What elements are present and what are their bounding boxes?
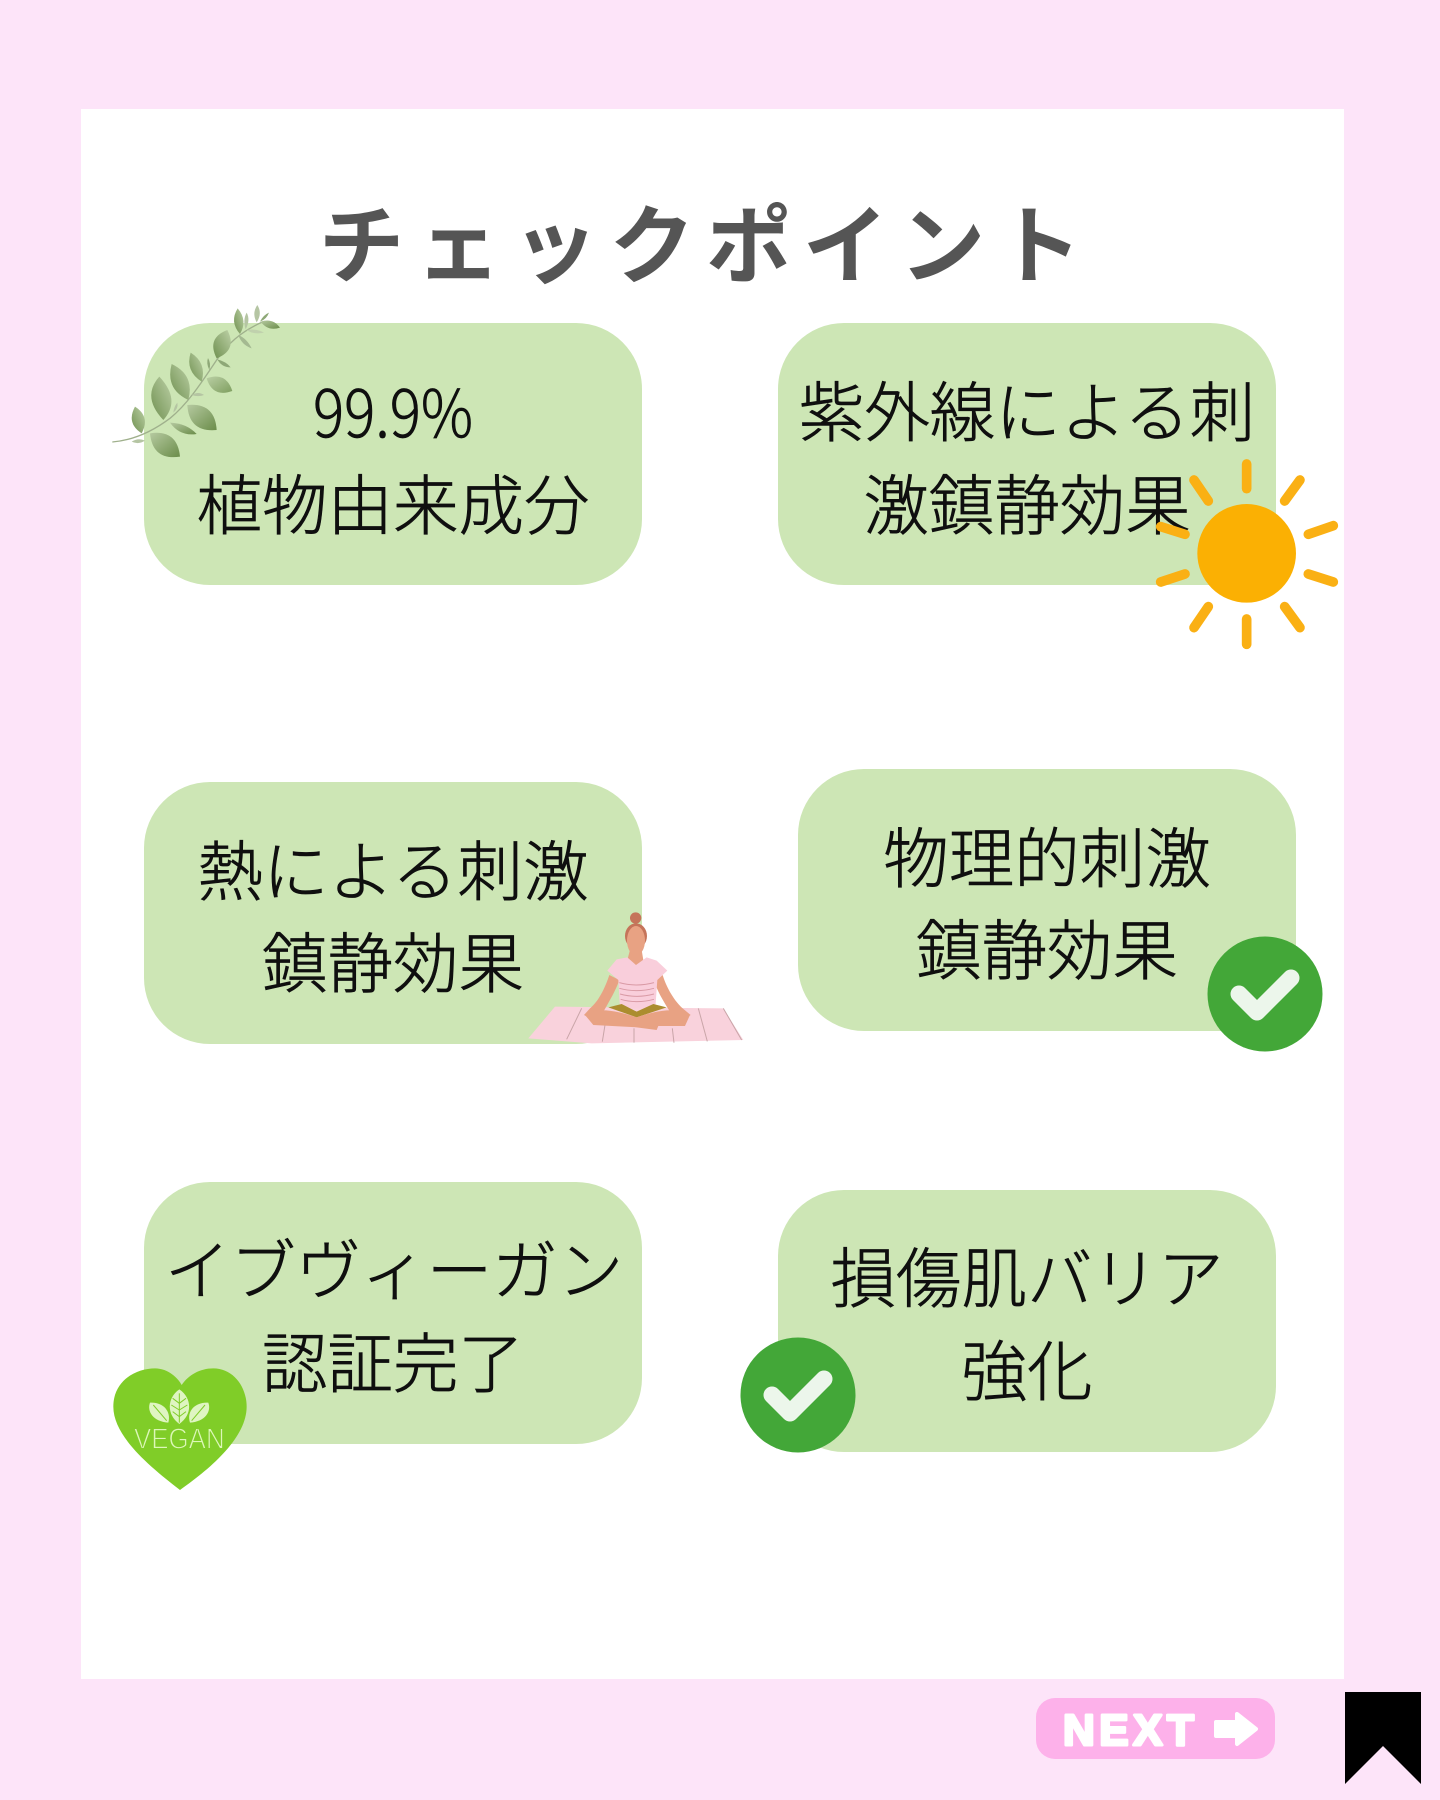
card: UV irritation soothing [778, 323, 1276, 585]
bookmark icon [1345, 1692, 1421, 1784]
card: plant-derived ingredients [144, 323, 642, 585]
card: UV irritation soothing: 激鎮静効果 [863, 453, 1191, 548]
card: Eve Vegan certified: 認証完了 [262, 1311, 524, 1406]
icon: vegan heart: VEGAN [134, 1424, 225, 1456]
card: heat irritation soothing: 鎮静効果 [262, 911, 524, 1006]
card: damaged skin barrier strengthening: 損傷肌バリア [830, 1226, 1224, 1321]
card: damaged skin barrier strengthening: 強化 [961, 1319, 1093, 1414]
card: damaged skin barrier strengthening [778, 1190, 1276, 1452]
card: physical irritation soothing: 鎮静効果 [916, 898, 1178, 993]
title: チェックポイント [319, 177, 1093, 301]
card: heat irritation soothing: 熱による刺激 [197, 819, 589, 914]
card: plant-derived ingredients: 植物由来成分 [196, 453, 590, 548]
card: plant-derived ingredients: 99.9% [313, 361, 473, 456]
next button: NEXT [1063, 1706, 1198, 1755]
icon: leaf sprig [112, 305, 280, 457]
white content panel [81, 109, 1344, 1679]
icon: vegan heart [113, 1368, 247, 1490]
card: UV irritation soothing: 紫外線による刺 [799, 360, 1255, 455]
next button [1036, 1698, 1275, 1759]
card: physical irritation soothing [798, 769, 1296, 1031]
icon: green check badge [1208, 936, 1322, 1052]
card: Eve Vegan certified: イブヴィーガン [165, 1218, 623, 1313]
icon: sun [1161, 464, 1333, 644]
icon: green check badge [740, 1338, 856, 1452]
card: physical irritation soothing: 物理的刺激 [883, 806, 1211, 901]
card: Eve Vegan certified [144, 1182, 642, 1444]
card: heat irritation soothing [144, 782, 642, 1044]
icon: meditating woman on mat [528, 912, 743, 1043]
